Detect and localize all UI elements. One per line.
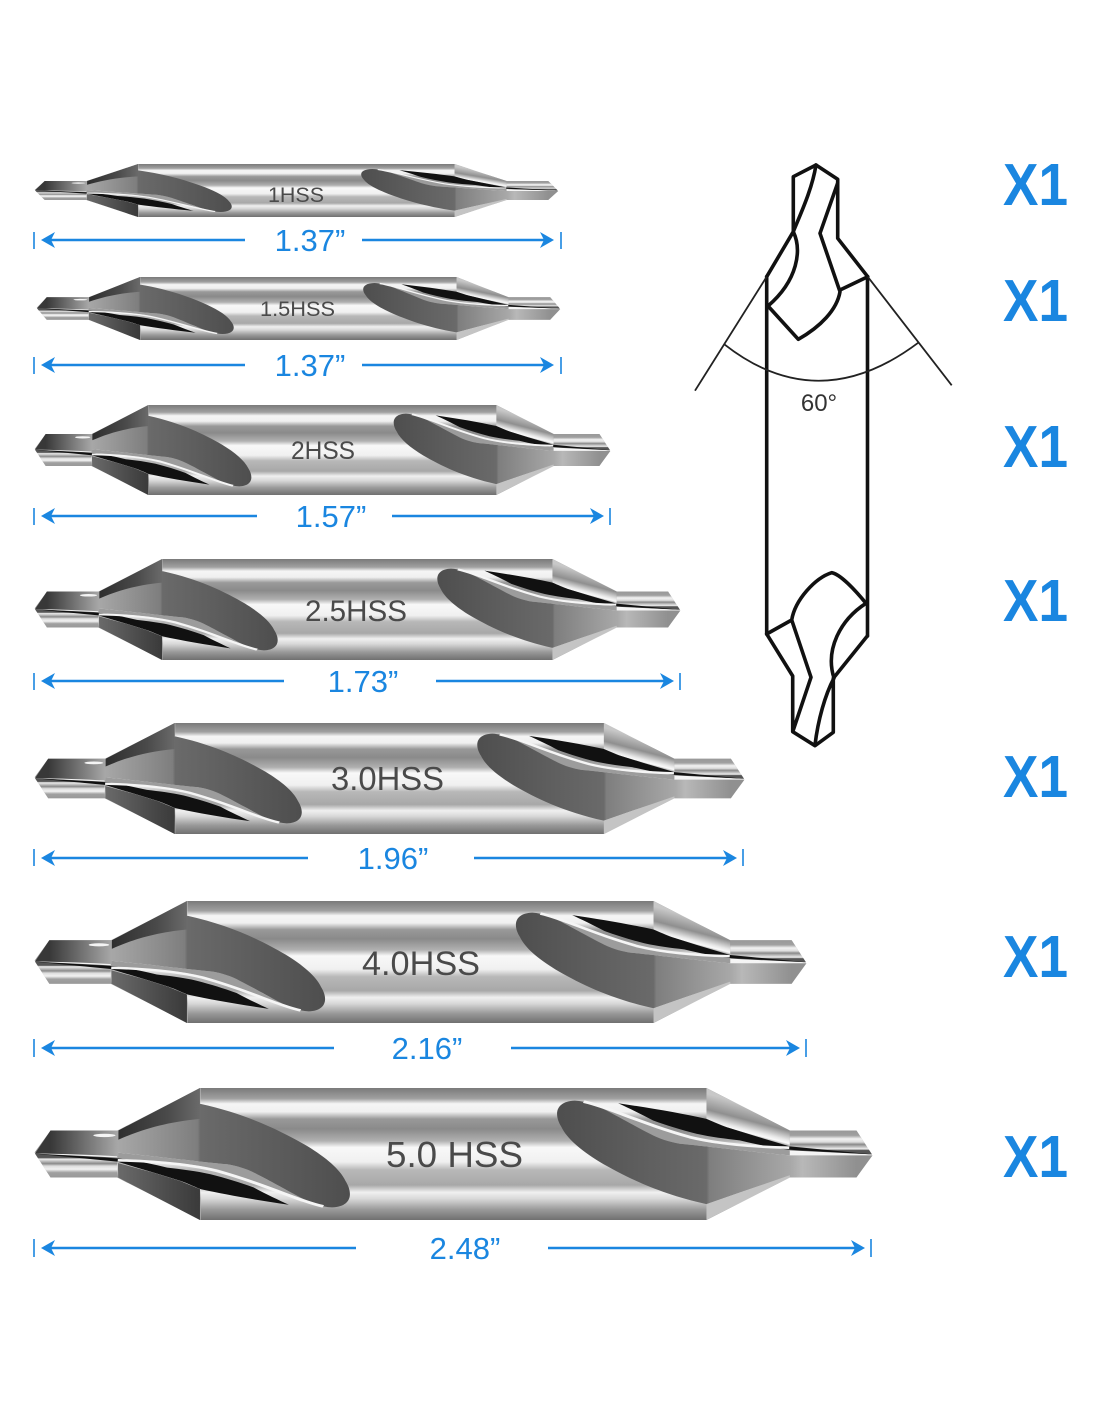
drill bit 4.0HSS bbox=[34, 901, 806, 1023]
drill bit 2.5HSS bbox=[35, 559, 680, 660]
dimension 1.37 in second bbox=[34, 348, 561, 383]
drill bit 1.5HSS bbox=[37, 277, 560, 340]
drill bit 2HSS bbox=[35, 405, 610, 495]
dimension 1.73 in bbox=[34, 664, 680, 699]
quantity 4: X1 bbox=[1003, 568, 1068, 634]
dimension 1.57 in: 1.57” bbox=[296, 499, 366, 534]
quantity 2: X1 bbox=[1003, 268, 1068, 334]
dimension 1.57 in bbox=[34, 499, 610, 534]
dimension 1.37 in second: 1.37” bbox=[275, 348, 345, 383]
dimension 1.73 in: 1.73” bbox=[328, 664, 398, 699]
dimension 2.48 in: 2.48” bbox=[430, 1231, 500, 1266]
diagram shank bbox=[767, 277, 868, 636]
label 3.0HSS: 3.0HSS bbox=[331, 760, 444, 797]
diagram flutes top bbox=[768, 165, 868, 339]
drill bit 1HSS bbox=[35, 164, 558, 217]
quantity 5: X1 bbox=[1003, 744, 1068, 810]
diagram outline top bbox=[767, 165, 868, 277]
dimension 2.16 in bbox=[34, 1031, 806, 1066]
diagram outline bottom bbox=[767, 634, 867, 746]
diagram flutes bottom bbox=[767, 573, 866, 745]
label 2HSS: 2HSS bbox=[291, 437, 355, 465]
angle lines and arc bbox=[695, 277, 952, 391]
technical diagram: 60 degree center drill bbox=[695, 165, 952, 746]
label 2.5HSS: 2.5HSS bbox=[305, 595, 407, 628]
quantity 7: X1 bbox=[1003, 1124, 1068, 1190]
label 1.5HSS: 1.5HSS bbox=[260, 298, 335, 321]
label 5.0 HSS: 5.0 HSS bbox=[386, 1134, 523, 1175]
quantity 3: X1 bbox=[1003, 414, 1068, 480]
angle label: 60° bbox=[801, 390, 837, 417]
label 1HSS: 1HSS bbox=[268, 184, 324, 207]
dimension 2.16 in: 2.16” bbox=[392, 1031, 462, 1066]
quantity 6: X1 bbox=[1003, 924, 1068, 990]
dimension 1.96 in bbox=[34, 841, 743, 876]
drill bit 3.0HSS bbox=[35, 723, 745, 834]
quantity labels bbox=[1003, 152, 1068, 1190]
drill bit 5.0 HSS bbox=[34, 1088, 873, 1220]
label 4.0HSS: 4.0HSS bbox=[362, 945, 480, 983]
dimension 1.37 in bbox=[34, 223, 561, 258]
quantity 1: X1 bbox=[1003, 152, 1068, 218]
dimension 2.48 in bbox=[34, 1231, 871, 1266]
dimension 1.96 in: 1.96” bbox=[358, 841, 428, 876]
dimension 1.37 in: 1.37” bbox=[275, 223, 345, 258]
